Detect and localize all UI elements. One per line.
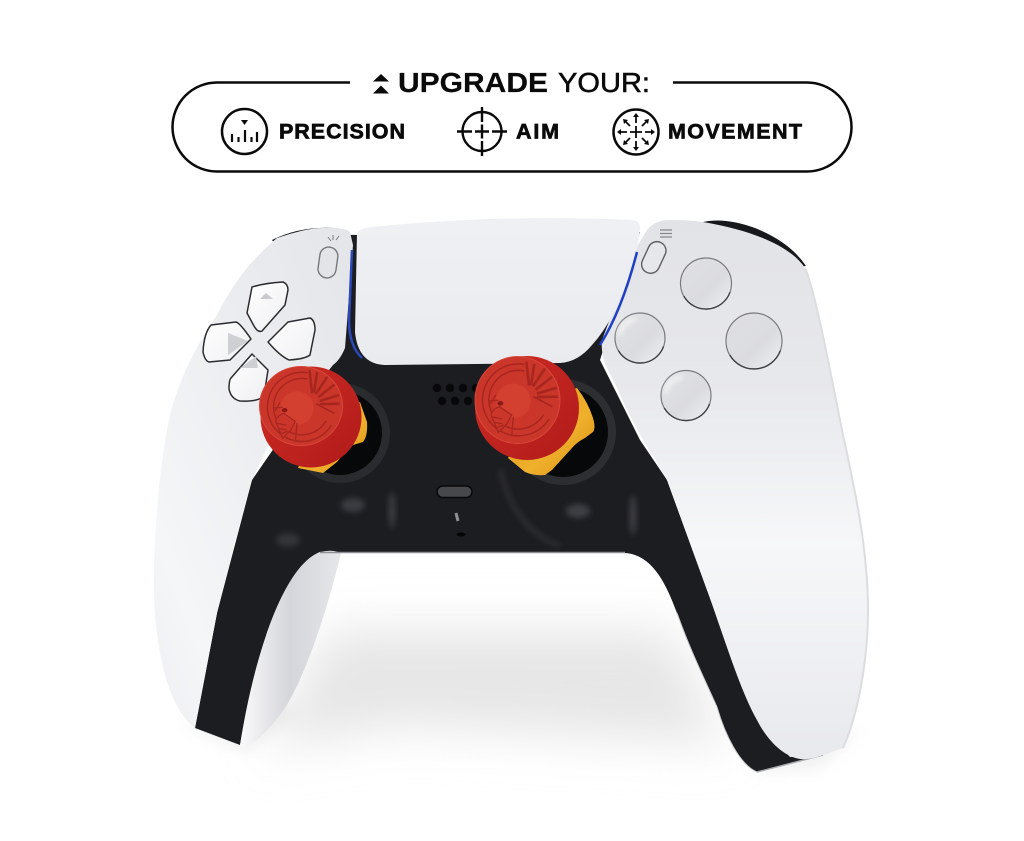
icon: double up triangles — [373, 74, 389, 94]
left grip inner white — [240, 551, 341, 748]
label: aim: AIM — [516, 120, 559, 144]
grip highlight — [276, 533, 300, 547]
body highlights — [276, 470, 640, 547]
d-pad up — [247, 282, 288, 331]
right stick socket — [510, 379, 616, 485]
mute button — [437, 486, 472, 498]
bottom edge light — [320, 552, 625, 554]
button bottom — [661, 370, 711, 421]
d-pad right — [268, 318, 315, 360]
icon: precision — [222, 109, 267, 154]
right cap face — [475, 356, 560, 444]
left white wing — [154, 228, 353, 728]
button right — [726, 313, 782, 369]
bottom right rim — [757, 755, 823, 772]
touchpad — [355, 218, 640, 365]
d-pad — [203, 282, 315, 401]
light bar left — [349, 250, 362, 358]
well highlight right — [566, 504, 590, 518]
well highlight left — [341, 498, 365, 512]
heading suffix: YOUR: — [558, 67, 650, 98]
left stick yellow stem — [298, 402, 367, 473]
right wing edge shading — [805, 268, 868, 748]
d-pad down — [229, 354, 268, 401]
left cap side — [260, 366, 362, 468]
heading: UPGRADE — [398, 67, 548, 98]
light bar right — [600, 252, 637, 345]
left thumbstick cap — [260, 366, 362, 468]
right stick yellow stem — [508, 388, 594, 475]
left cap face — [260, 366, 342, 446]
right strip edge highlight — [677, 613, 757, 772]
speaker grille — [433, 384, 480, 405]
left cap emblem — [267, 370, 340, 441]
label: movement: MOVEMENT — [668, 120, 802, 144]
pill outline — [172, 82, 852, 172]
button top — [680, 258, 732, 309]
bowl edge right — [500, 470, 560, 546]
ground shadow — [265, 630, 725, 750]
black centre body — [195, 232, 823, 772]
right cap emblem — [483, 362, 558, 436]
mic hole — [456, 532, 466, 536]
shadow below grips — [185, 700, 860, 772]
label: precision: PRECISION — [279, 120, 405, 144]
right cap side — [475, 356, 579, 460]
options button — [639, 230, 672, 276]
d-pad left — [203, 322, 251, 362]
top bumpers — [272, 220, 806, 270]
button left — [615, 313, 665, 363]
lower body light band — [330, 542, 640, 550]
face buttons — [615, 258, 782, 421]
right white wing — [602, 220, 868, 759]
right thumbstick cap — [475, 356, 579, 460]
ridge centre — [388, 492, 396, 528]
ridge right — [630, 495, 636, 535]
mic icon — [456, 513, 458, 521]
icon: aim crosshair — [457, 107, 507, 156]
create button — [317, 235, 339, 279]
icon: movement arrows — [614, 110, 658, 154]
controller — [154, 218, 868, 772]
badge: upgrade your — [172, 67, 852, 172]
left stick socket — [290, 383, 390, 483]
